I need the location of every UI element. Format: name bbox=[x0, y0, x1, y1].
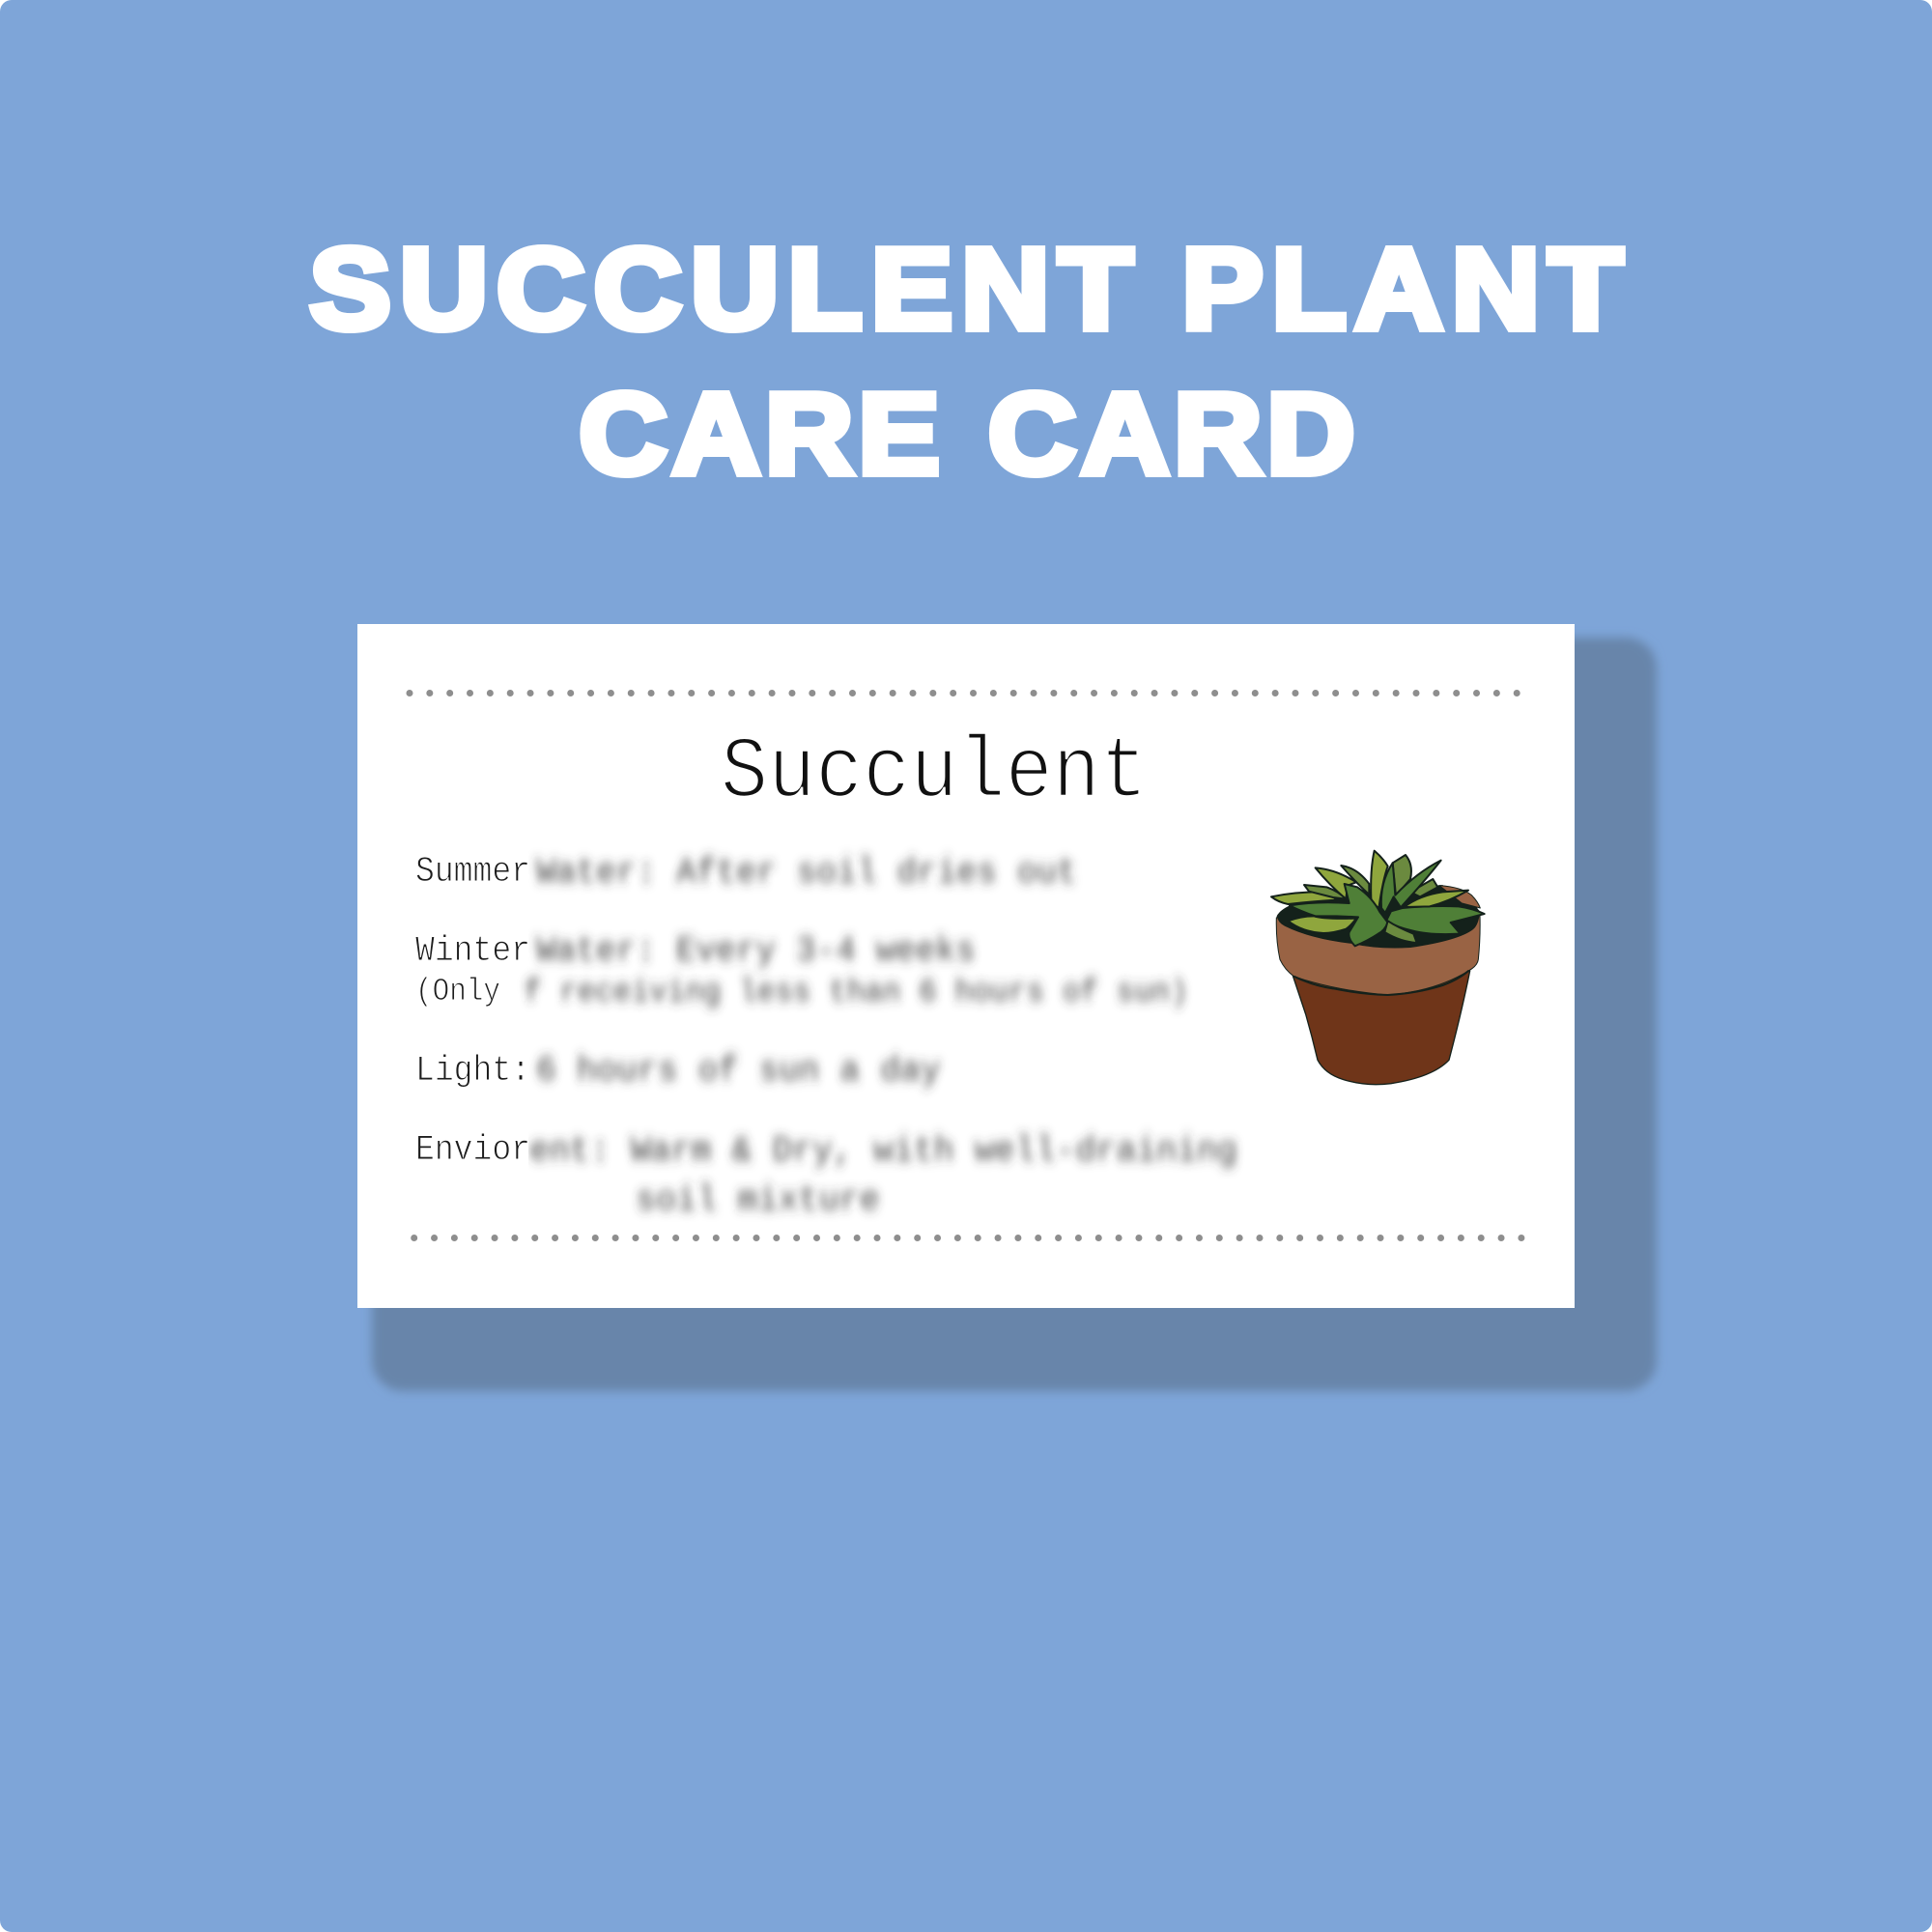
row: summer water: Water: After soil dries out bbox=[536, 853, 1077, 893]
row: environment: Envior bbox=[415, 1130, 530, 1171]
row: environment: ent: Warm & Dry, with well-draining bbox=[529, 1131, 1237, 1171]
title: CARD bbox=[988, 369, 1354, 497]
row: summer water: Summer bbox=[415, 852, 530, 893]
row: winter water: Winter bbox=[415, 931, 530, 972]
row: environment: soil mixture bbox=[636, 1180, 880, 1220]
row: winter water: Water: Every 3-4 weeks bbox=[536, 931, 976, 971]
pot rim bbox=[1276, 886, 1480, 995]
row: light: 6 hours of sun a day bbox=[536, 1051, 941, 1091]
pot body bbox=[1293, 971, 1470, 1085]
title: PLANT bbox=[1182, 224, 1623, 353]
soil bbox=[1277, 886, 1480, 948]
card heading: Succulent bbox=[721, 724, 1148, 823]
icon: potted succulent bbox=[1271, 851, 1485, 1085]
panel: care card bbox=[357, 624, 1575, 1308]
card shadow bbox=[372, 638, 1657, 1391]
title bbox=[309, 224, 1623, 497]
title: CARE bbox=[580, 369, 940, 497]
row: winter note: (Only bbox=[415, 974, 500, 1009]
row: environment bbox=[415, 1130, 1237, 1220]
row: light: Light: bbox=[415, 1051, 530, 1092]
row: winter note: f receiving less than 6 hours of sun) bbox=[524, 975, 1188, 1010]
leaves bbox=[1271, 851, 1485, 946]
title: SUCCULENT bbox=[309, 224, 1133, 353]
